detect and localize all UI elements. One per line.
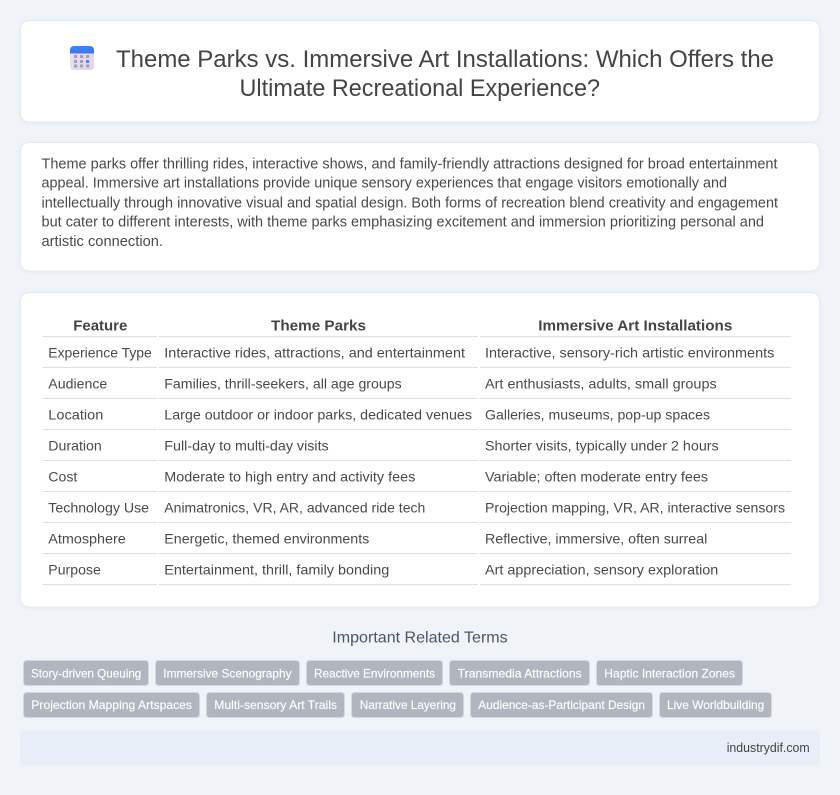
table header row: Feature — [73, 318, 127, 334]
tag: transmedia attractions: Transmedia Attractions — [458, 666, 582, 680]
row: experience type — [48, 344, 774, 360]
row: technology use: Animatronics, VR, AR, advanced ride tech — [164, 500, 425, 516]
row: audience — [48, 376, 717, 392]
tag: audience-as-participant design: Audience-as-Participant Design — [478, 698, 645, 712]
tag: live worldbuilding: Live Worldbuilding — [667, 698, 764, 712]
row: experience type: Interactive rides, attractions, and entertainment — [164, 344, 465, 360]
row: cost — [48, 468, 708, 484]
panel: comparison table — [20, 292, 820, 607]
tag: immersive scenography — [156, 660, 300, 686]
row: location — [48, 406, 710, 422]
heading: important related terms: Important Related Terms — [332, 630, 508, 647]
row: atmosphere: Reflective, immersive, often surreal — [485, 530, 707, 546]
row: cost: Variable; often moderate entry fees — [485, 468, 708, 484]
text block: introduction paragraph: intellectually through innovative visual and spatial design. Both forms of recreation blend creativity and engagement — [42, 196, 778, 212]
row: duration: Shorter visits, typically under 2 hours — [485, 438, 719, 454]
row: purpose — [48, 562, 718, 578]
panel: header — [20, 20, 820, 122]
row: cost: Cost — [48, 468, 77, 484]
tag: story-driven queuing — [24, 660, 148, 686]
tag: reactive environments — [306, 660, 442, 686]
text block: introduction paragraph: appeal. Immersive art installations provide unique sensory experiences that engage visitors emotionally and — [42, 176, 727, 192]
tag: projection mapping artspaces: Projection Mapping Artspaces — [31, 698, 192, 712]
tag: haptic interaction zones: Haptic Interaction Zones — [604, 666, 735, 680]
row: audience: Families, thrill-seekers, all age groups — [164, 376, 402, 392]
tag: live worldbuilding — [660, 692, 772, 718]
footer source text: industrydif.com — [727, 740, 810, 755]
row: location: Large outdoor or indoor parks, dedicated venues — [164, 406, 472, 422]
row: atmosphere: Energetic, themed environments — [164, 530, 369, 546]
text block: introduction paragraph: Theme parks offer thrilling rides, interactive shows, and family-friendly attractions designed for broad entertainment — [42, 156, 778, 172]
row: technology use: Technology Use — [48, 500, 149, 516]
tag: story-driven queuing: Story-driven Queuing — [31, 666, 141, 680]
row: duration: Duration — [48, 438, 102, 454]
row: purpose: Purpose — [48, 562, 101, 578]
row: atmosphere: Atmosphere — [48, 530, 126, 546]
tag: multi-sensory art trails — [206, 692, 344, 718]
tag: reactive environments: Reactive Environments — [314, 666, 435, 680]
row: location: Location — [48, 406, 103, 422]
tag: multi-sensory art trails: Multi-sensory Art Trails — [214, 698, 337, 712]
text block: introduction paragraph: artistic connection. — [42, 234, 163, 250]
tag: haptic interaction zones — [596, 660, 742, 686]
row: location: Galleries, museums, pop-up spaces — [485, 406, 710, 422]
tag: narrative layering: Narrative Layering — [360, 698, 456, 712]
panel: introduction — [20, 142, 820, 271]
table rules — [43, 336, 791, 584]
tag: transmedia attractions — [450, 660, 590, 686]
row: audience: Art enthusiasts, adults, small groups — [485, 376, 717, 392]
section: related terms — [24, 630, 772, 718]
tag: audience-as-participant design — [470, 692, 652, 718]
table header row — [73, 318, 732, 334]
row: experience type: Interactive, sensory-rich artistic environments — [485, 344, 774, 360]
tag: immersive scenography: Immersive Scenography — [163, 666, 292, 680]
title: Theme Parks vs. Immersive Art Installations: Which Offers the — [116, 46, 774, 73]
footer — [20, 731, 820, 765]
icon: calendar — [70, 46, 94, 70]
text block: introduction paragraph: but cater to different interests, with theme parks emphasizing excitement and immersion prioritizing personal and — [42, 215, 764, 231]
table header row: Immersive Art Installations — [538, 318, 732, 334]
title — [116, 46, 774, 102]
row: technology use: Projection mapping, VR, AR, interactive sensors — [485, 500, 785, 516]
table header row: Theme Parks — [271, 318, 366, 334]
row: experience type: Experience Type — [48, 344, 152, 360]
row: technology use — [48, 500, 785, 516]
row: duration — [48, 438, 719, 454]
row: atmosphere — [48, 530, 707, 546]
row: duration: Full-day to multi-day visits — [164, 438, 329, 454]
row: purpose: Art appreciation, sensory exploration — [485, 562, 718, 578]
row: audience: Audience — [48, 376, 108, 392]
row: purpose: Entertainment, thrill, family bonding — [164, 562, 389, 578]
title: Ultimate Recreational Experience? — [240, 75, 600, 102]
tag: projection mapping artspaces — [24, 692, 200, 718]
row: cost: Moderate to high entry and activity fees — [164, 468, 415, 484]
text block: introduction paragraph — [42, 156, 778, 250]
tag: narrative layering — [352, 692, 464, 718]
